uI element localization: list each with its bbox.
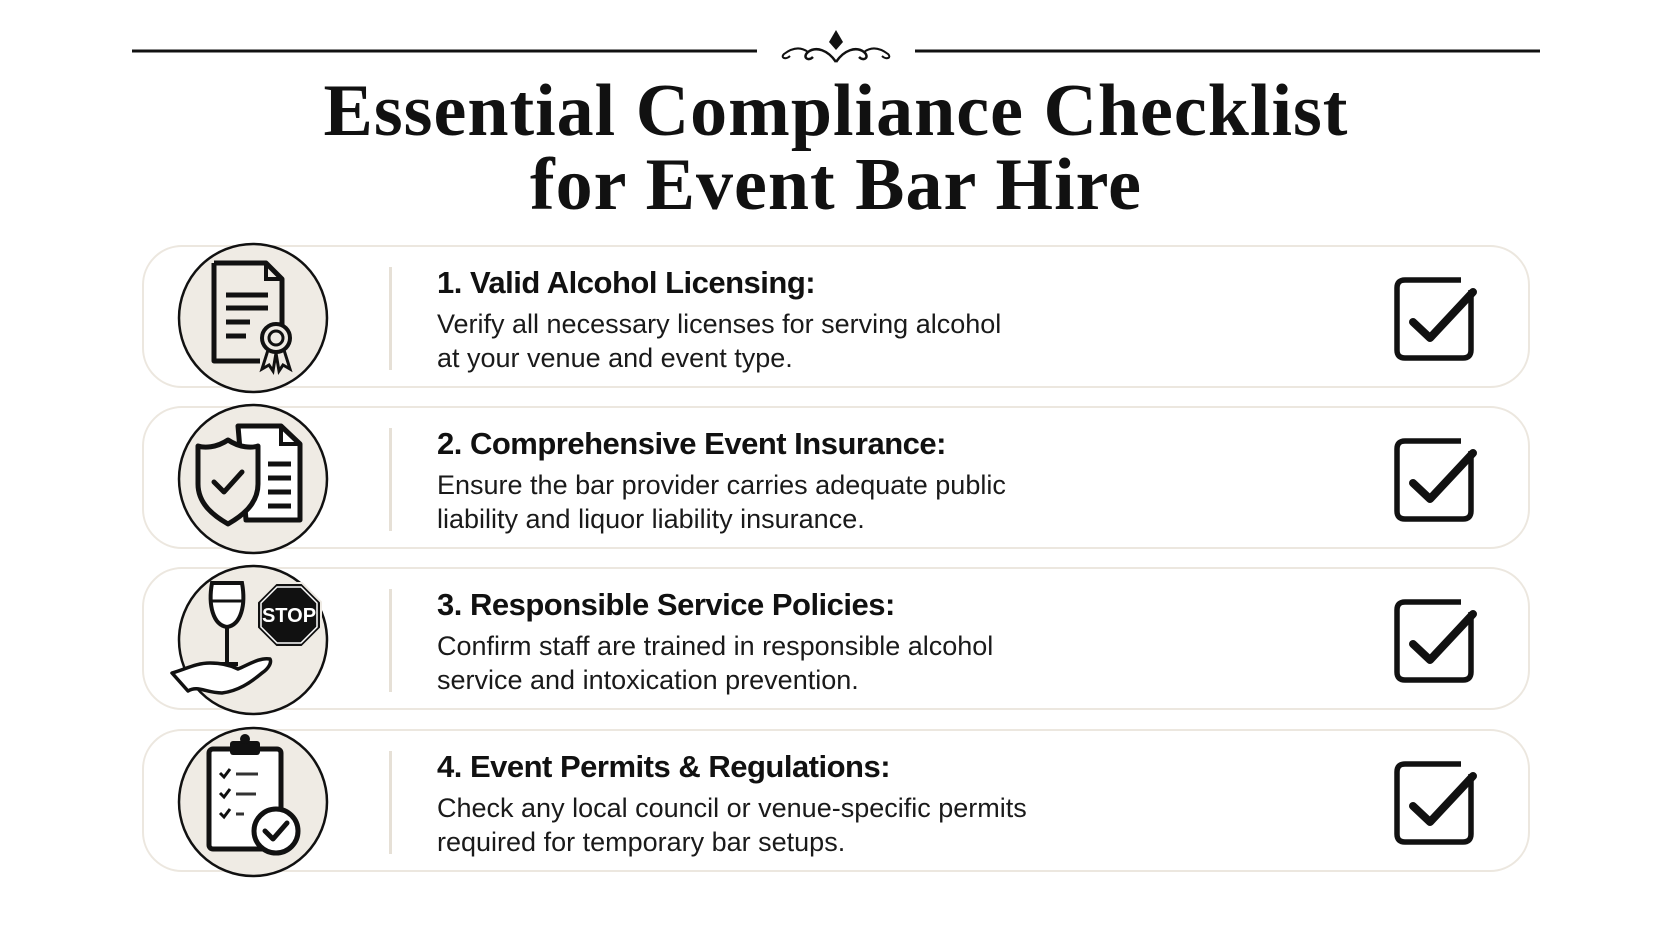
icon: insurance shield: [178, 404, 328, 554]
title: [324, 70, 1348, 226]
icon: checkbox: [1394, 438, 1477, 522]
heading 4: 4. Event Permits & Regulations:: [437, 749, 890, 784]
text 2: liability and liquor liability insurance.: [437, 504, 865, 534]
icon: checkbox: [1394, 761, 1477, 845]
panel: item 4: [142, 726, 1530, 878]
text 2: [437, 470, 1006, 534]
panel: item 1: [142, 242, 1530, 394]
text 4: Check any local council or venue-specific permits: [437, 793, 1027, 823]
text 4: [437, 793, 1027, 857]
icon: responsible service: STOP: [262, 605, 316, 627]
text 3: Confirm staff are trained in responsible alcohol: [437, 631, 993, 661]
heading 2: 2. Comprehensive Event Insurance:: [437, 426, 946, 461]
title: for Event Bar Hire: [530, 144, 1142, 226]
title: Essential Compliance Checklist: [324, 70, 1348, 152]
text 3: [437, 631, 993, 695]
heading 1: 1. Valid Alcohol Licensing:: [437, 265, 815, 300]
text 2: Ensure the bar provider carries adequate public: [437, 470, 1006, 500]
header ornament: [132, 30, 1540, 63]
icon: license certificate: [178, 242, 328, 394]
icon: responsible service: [170, 564, 328, 716]
text 4: required for temporary bar setups.: [437, 827, 845, 857]
panel: item 2: [142, 404, 1530, 554]
panel: item 3: [142, 564, 1530, 716]
text 1: Verify all necessary licenses for serving alcohol: [437, 309, 1001, 339]
icon: checkbox: [1394, 277, 1477, 361]
text 1: at your venue and event type.: [437, 343, 793, 373]
heading 3: 3. Responsible Service Policies:: [437, 587, 895, 622]
icon: checkbox: [1394, 599, 1477, 683]
text 3: service and intoxication prevention.: [437, 665, 859, 695]
text 1: [437, 309, 1001, 373]
icon: clipboard permits: [178, 726, 328, 878]
